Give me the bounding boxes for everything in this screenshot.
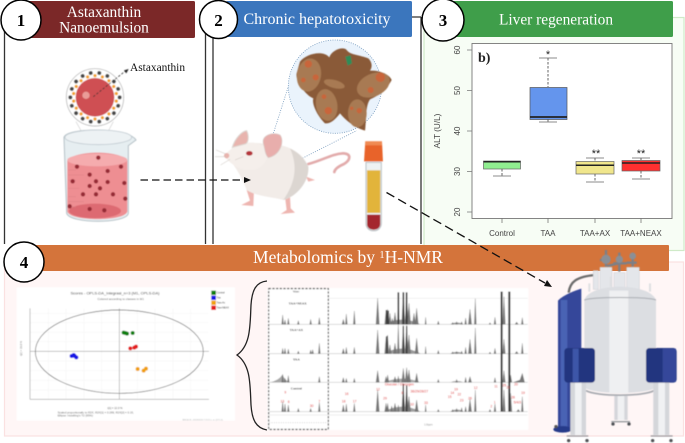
top turrets [593, 267, 639, 289]
beaker glass [64, 130, 136, 221]
blue clamps [564, 348, 595, 383]
box: Control [484, 161, 520, 176]
liquid [67, 153, 127, 219]
sample labels: TAA [293, 358, 300, 362]
dark surfactant heads [68, 71, 122, 124]
helium hose [569, 275, 595, 293]
x axis: Control [489, 229, 515, 238]
axis label and footnote: t[1] = 12.0 % [107, 406, 123, 410]
chart: OPLS-DA score plot: t[2] = 15.0 % [19, 340, 23, 356]
spectrum: Control [282, 383, 523, 412]
peak labels: 12 [376, 388, 380, 392]
box: TAA: * [546, 49, 551, 61]
label: astaxanthin: Astaxanthin [130, 62, 185, 74]
dashed sample label box [269, 289, 328, 429]
sample labels: Control [291, 387, 302, 391]
peak labels: 19 [454, 388, 458, 392]
chart: ALT box plot [433, 44, 672, 238]
y axis: 40 [453, 126, 462, 135]
y axis: ALT (U/L) [433, 113, 442, 148]
score points [70, 331, 148, 373]
box: TAA [530, 49, 567, 122]
peak labels: 18 [342, 400, 346, 404]
y axis: 30 [453, 167, 462, 176]
baselines [269, 324, 528, 412]
peak labels: 23 [460, 399, 464, 403]
arrow: blood sample to NMR [386, 192, 552, 287]
spectrum: TAA [269, 368, 525, 382]
step badge 3 [422, 0, 464, 41]
header: metabolomics: 1 [379, 250, 385, 261]
peak labels: 9 [284, 391, 286, 395]
step badge 1: 1 [17, 11, 25, 30]
tail [308, 153, 349, 172]
chart: OPLS-DA score plot: Ellipse: Hotelling's T2 (95%) [58, 413, 93, 417]
peak labels: 26 [468, 396, 472, 400]
peak labels: 17 [353, 399, 357, 403]
icon: nanoparticle [66, 69, 129, 126]
peak labels: 28 [511, 396, 515, 400]
y axis: 20 [453, 207, 462, 216]
header: metabolomics: H-NMR [385, 247, 443, 267]
pointer arrow [93, 71, 125, 97]
legs [570, 382, 669, 435]
step badge 3: 3 [439, 11, 447, 30]
blue column [558, 289, 581, 429]
tall solvent peaks [502, 292, 509, 412]
peak labels: 21 [506, 385, 510, 389]
whiskers [215, 150, 243, 165]
chart: OPLS-DA score plot [17, 287, 235, 421]
chart: OPLS-DA score plot: Colored according to classes in M1 [97, 297, 144, 301]
header: astaxanthin nanoemulsion: Nanoemulsion [59, 20, 149, 36]
legend: Taa+NEAX [217, 306, 229, 309]
step badge 2: 2 [214, 11, 223, 30]
peak labels: 5/4/3 [514, 401, 521, 405]
sample labels: Water [293, 290, 299, 293]
chart: OPLS-DA score plot: SIMCA 18 - 09/09/2020 7:13:21 a. m. (UTC-5) [182, 418, 223, 421]
y axis: 50 [453, 86, 462, 95]
header: astaxanthin nanoemulsion [28, 1, 195, 38]
header: astaxanthin nanoemulsion: Astaxanthin [67, 4, 141, 21]
hind and front feet [241, 177, 315, 214]
arrow: nanoemulsion to mouse [140, 177, 251, 183]
icon: NMR spectrometer [553, 250, 677, 442]
icon: curly brace [237, 281, 267, 430]
spectrum: TAA+AX [282, 323, 523, 354]
peak labels: 1 [494, 401, 496, 405]
x axis: TAA [541, 229, 556, 238]
peak labels: 15 [448, 395, 452, 399]
header: liver regeneration [450, 1, 673, 37]
spectrum: TAA+NEAX [282, 292, 523, 324]
header: metabolomics [28, 245, 669, 271]
y axis: 60 [453, 45, 462, 54]
chart: NMR spectra: 1.0/ppm [424, 424, 433, 426]
nanoparticle zoom lines [76, 122, 113, 147]
magnet body [584, 287, 656, 393]
y axis [433, 45, 472, 216]
peak labels: 25 [502, 383, 506, 387]
icon: mouse [215, 131, 349, 214]
x axis [489, 218, 662, 238]
sample labels: TAA+NEAX [289, 301, 307, 305]
peak labels: 16 [345, 392, 349, 396]
peak labels: 29 [383, 397, 387, 401]
box: TAA+NEAX: ** [637, 148, 646, 160]
grid and axes [30, 308, 208, 399]
chart: NMR spectra [267, 288, 528, 430]
icon: blood tube [364, 141, 383, 231]
peak labels: 10 [410, 403, 414, 407]
box: TAA+AX [576, 148, 614, 182]
step badge 1 [1, 0, 41, 40]
peak labels: 2 [490, 405, 492, 409]
header: chronic hepatotoxicity [226, 1, 412, 37]
peak labels: 14 [450, 391, 454, 395]
nose and eye [224, 153, 229, 158]
header: metabolomics: Metabolomics by [253, 247, 375, 267]
header: liver regeneration: Liver regeneration [499, 12, 613, 28]
chart: ALT box plot: b) [478, 51, 491, 66]
peak labels: Glucose / Glycogen [385, 383, 414, 387]
peak labels: 13 [280, 399, 284, 403]
orange surfactant heads [72, 74, 118, 121]
droplets [67, 155, 127, 212]
panel: hepatotoxicity frame [213, 17, 421, 244]
x axis: TAA+NEAX [620, 229, 662, 238]
x axis: TAA+AX [580, 229, 611, 238]
peak labels: 36/29/28/27 [411, 390, 428, 394]
icon: beaker with nanoemulsion [64, 122, 136, 221]
header: chronic hepatotoxicity: Chronic hepatotoxicity [243, 11, 391, 28]
sample labels [289, 290, 307, 391]
step badge 4: 4 [20, 253, 29, 272]
peak labels: 12 [474, 386, 478, 390]
head [224, 143, 267, 170]
scale marks [68, 170, 84, 207]
peak labels [280, 383, 525, 409]
peak labels: 11 [494, 385, 498, 389]
peak labels: 8 [401, 391, 403, 395]
ears [232, 131, 248, 147]
peak labels: 33 [424, 401, 428, 405]
sample labels: TAA+AX [290, 328, 304, 332]
peak labels: 20 [514, 383, 518, 387]
peak labels: 7 [318, 399, 320, 403]
chart: OPLS-DA score plot: Scores - OPLS-DA_Integrasi_n=3 (M1, OPLS-DA) [71, 291, 160, 296]
legend [211, 291, 229, 310]
icon: liver zoom bubble [258, 40, 382, 181]
step badge 2 [200, 0, 238, 38]
step badge 4 [4, 242, 44, 282]
legend: Taa+Ax [217, 301, 226, 304]
icon: fibrotic liver [294, 48, 394, 131]
peak labels: 6 [288, 400, 290, 404]
peak labels: 30 [310, 404, 314, 408]
panel: liver regeneration background [424, 18, 684, 250]
panel: metabolomics background [4, 262, 684, 436]
peak labels: 19 [521, 391, 525, 395]
feet [567, 422, 673, 436]
ppm axis [269, 414, 528, 416]
chart: OPLS-DA score plot: Scaled proportionally to R2X, R2X[1] = 0.289, R2X[2] = 0.15, [58, 411, 134, 415]
legend: Control [217, 292, 225, 295]
panel: astaxanthin frame [4, 30, 206, 244]
box: TAA+AX: ** [592, 148, 601, 160]
body [230, 143, 308, 200]
legend: Taa [217, 296, 221, 299]
box: TAA+NEAX [622, 148, 660, 179]
peak labels: 22 [457, 392, 461, 396]
